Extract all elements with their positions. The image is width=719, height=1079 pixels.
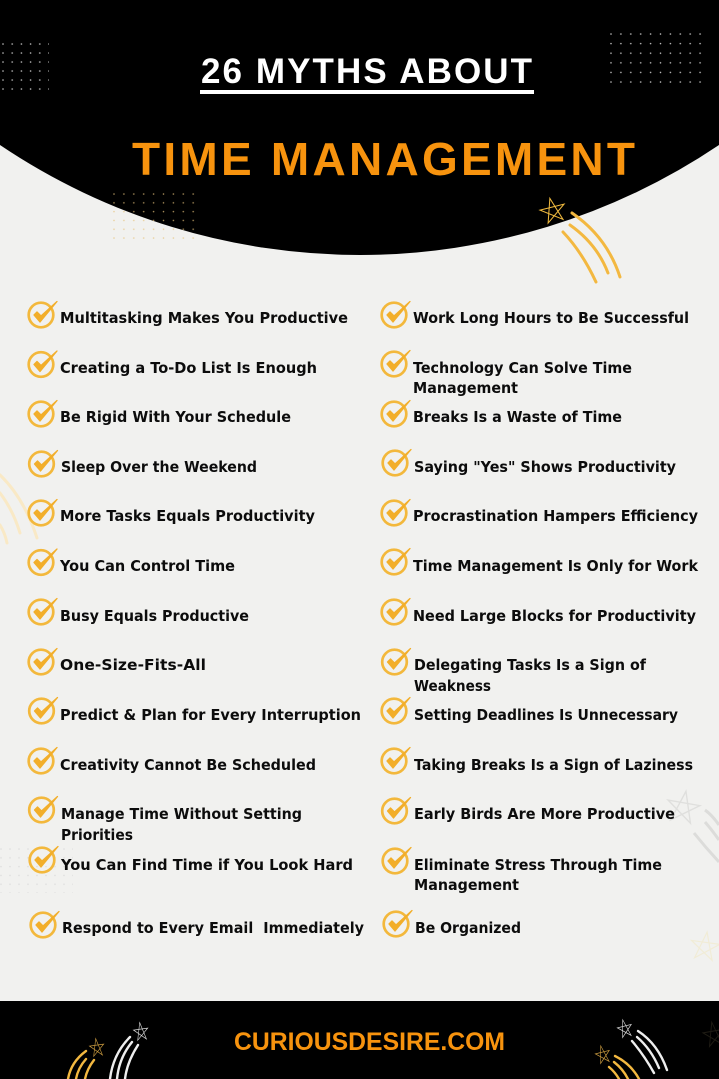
myth 1: Multitasking Makes You Productive (60, 309, 348, 327)
myth 23 (382, 748, 693, 774)
myth 11: Manage Time Without Setting (61, 805, 302, 823)
myth 6: You Can Control Time (59, 557, 235, 575)
footer website text: CURIOUSDESIRE.COM (234, 1028, 505, 1056)
myth 19 (382, 548, 699, 575)
myth 14 (382, 302, 689, 327)
dot pattern: below title (113, 193, 196, 240)
myth 14: Work Long Hours to Be Successful (413, 309, 689, 327)
myth 4 (29, 450, 257, 476)
myth 2: Creating a To-Do List Is Enough (60, 359, 317, 377)
myth 9: Predict & Plan for Every Interruption (60, 706, 361, 724)
icon: footer shooting stars right (594, 1018, 667, 1079)
myth 11: Priorities (61, 826, 133, 844)
footer band (0, 1001, 719, 1079)
myth 21 (382, 648, 646, 695)
faint arcs: left (0, 475, 37, 543)
myth 21: Weakness (414, 677, 491, 695)
myth 4: Sleep Over the Weekend (61, 458, 257, 476)
icon: shooting star top right (538, 195, 620, 282)
myth 5: More Tasks Equals Productivity (60, 507, 315, 525)
myth 13 (31, 912, 364, 937)
faint star and arcs: lower right (665, 788, 719, 862)
myth 12 (30, 846, 353, 874)
icon: footer dark star far right (701, 1020, 719, 1047)
myth 7: Busy Equals Productive (60, 607, 249, 625)
myth 13: Respond to Every Email Immediately (62, 919, 364, 937)
myth 19: Time Management Is Only for Work (413, 557, 699, 575)
myth 25: Eliminate Stress Through Time (414, 856, 662, 874)
header black curved shape (0, 0, 719, 255)
faint star: right margin (689, 930, 719, 961)
myth 10 (29, 748, 316, 774)
myth 16: Breaks Is a Waste of Time (413, 408, 622, 426)
myth 2 (29, 351, 317, 377)
dot pattern: top right (610, 33, 702, 83)
myth 17: Saying "Yes" Shows Productivity (414, 458, 676, 476)
title line two: TIME MANAGEMENT (132, 133, 635, 185)
myth 6 (29, 549, 235, 575)
myth 12: You Can Find Time if You Look Hard (60, 856, 353, 874)
myth 10: Creativity Cannot Be Scheduled (60, 756, 316, 774)
myth 24 (382, 798, 675, 823)
myth 26: Be Organized (415, 919, 521, 937)
myth 17 (383, 450, 676, 476)
dot pattern: top left (0, 43, 49, 90)
myth 11 (29, 796, 302, 844)
title underline (200, 90, 534, 94)
title line one: 26 MYTHS ABOUT (201, 52, 532, 91)
myth 8: One-Size-Fits-All (60, 656, 206, 674)
myth 18: Procrastination Hampers Efficiency (413, 507, 698, 525)
myth 15: Technology Can Solve Time (413, 359, 632, 377)
myth 20 (382, 598, 696, 625)
myth 21: Delegating Tasks Is a Sign of (414, 656, 646, 674)
myth 5 (29, 500, 315, 525)
myth 25: Management (414, 876, 520, 894)
myth 1 (29, 302, 348, 327)
left column of myths (29, 302, 364, 937)
myth 26 (384, 910, 521, 937)
myth 20: Need Large Blocks for Productivity (413, 607, 696, 625)
myth 8 (29, 648, 206, 674)
myth 3: Be Rigid With Your Schedule (60, 408, 291, 426)
myth 16 (382, 400, 622, 426)
dot pattern: lower left faint (0, 848, 73, 893)
myth 9 (29, 698, 361, 724)
myth 3 (29, 400, 291, 426)
icon: footer shooting stars left (68, 1022, 149, 1079)
myth 24: Early Birds Are More Productive (414, 805, 675, 823)
myth 22 (382, 698, 678, 724)
right column of myths (382, 302, 699, 937)
myth 7 (29, 598, 249, 625)
myth 15: Management (413, 379, 519, 397)
myth 18 (382, 500, 698, 525)
myth 23: Taking Breaks Is a Sign of Laziness (414, 756, 693, 774)
myth 22: Setting Deadlines Is Unnecessary (414, 706, 678, 724)
myth 15 (382, 350, 632, 397)
myth 25 (383, 848, 662, 894)
